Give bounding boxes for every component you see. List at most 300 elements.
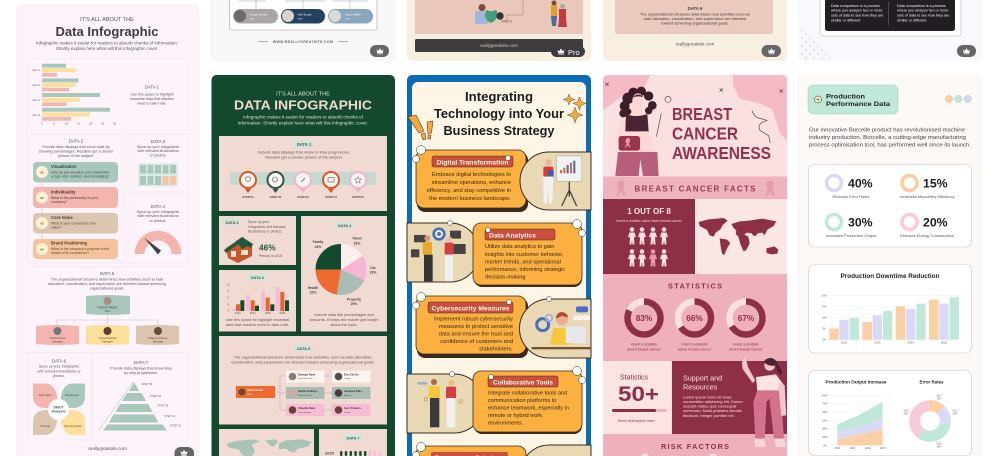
panel: data 6 SWOT bbox=[27, 353, 92, 440]
icon: exclamation marks bbox=[408, 115, 433, 140]
dark comparison panel: Data comparison is a process bbox=[897, 4, 946, 8]
data 1 caption: DATA 1 bbox=[145, 84, 160, 90]
panel: KPI rings bbox=[808, 164, 972, 247]
panel: data 5 org chart: The organizational structure determines how activities such as task bbox=[51, 278, 163, 282]
bar chart: 10 bbox=[65, 122, 69, 126]
pyramid chart: STEP 01 bbox=[170, 424, 182, 428]
org node: manager two: Manager bbox=[102, 340, 113, 344]
panel: data 4 pie chart bbox=[301, 216, 387, 332]
map shape bbox=[699, 218, 778, 255]
subtitle: IT'S ALL ABOUT THE bbox=[80, 17, 134, 23]
org node: president bbox=[86, 295, 130, 315]
badge: gears bbox=[412, 292, 552, 309]
bar chart: 5 bbox=[53, 122, 55, 126]
badge: gears bbox=[412, 146, 426, 162]
panel: data 1 steps: DATA 1 bbox=[297, 142, 312, 147]
panel: data 4 gauge bbox=[128, 194, 188, 263]
data 6 text: toward achieving organizational goals. bbox=[661, 20, 729, 26]
panel: data 4 gauge: with relevant illustrations bbox=[137, 214, 179, 218]
panel: data 5 org chart: DATA 5 bbox=[100, 271, 115, 276]
panel: data 3 waffle bbox=[128, 134, 188, 192]
donut 67%: 67% bbox=[738, 313, 755, 323]
panel: data 1 bar chart bbox=[27, 59, 188, 131]
body text bbox=[485, 244, 565, 280]
panel: technology strategy template bbox=[407, 75, 591, 456]
intro paragraph: industry production. Borcelle, a cutting-edge manufacturing bbox=[809, 135, 966, 141]
title: BREAST bbox=[672, 104, 732, 124]
org row 1: Social Specialist bbox=[298, 377, 313, 380]
panel: data 1 steps bbox=[219, 136, 387, 211]
panel: data 5 org chart: DATA 5 bbox=[297, 347, 310, 351]
halftone dots bbox=[801, 29, 831, 59]
badge: crown bbox=[957, 45, 976, 57]
panel: data 2 list: picture of the subject. bbox=[58, 154, 94, 158]
org node: president: Francis Weiss bbox=[98, 306, 118, 310]
data 6 text bbox=[640, 6, 750, 26]
org row 3: Sales Manager bbox=[298, 412, 312, 414]
pie labels: 22% bbox=[310, 290, 316, 294]
org node: manager one bbox=[36, 325, 79, 345]
dark comparison panel: where you analyze two or more bbox=[831, 8, 882, 12]
footer bar bbox=[415, 39, 583, 52]
person pill: blue: Jason Miller bbox=[345, 12, 361, 16]
heading pill bbox=[488, 376, 558, 387]
pictogram row bbox=[340, 451, 381, 456]
body text: communication platforms to bbox=[488, 398, 556, 404]
dark comparison panel: sets of data to see how they are bbox=[897, 14, 949, 18]
org row 1: Eve Chi Ko bbox=[344, 372, 359, 376]
panel: support and resources: suscipit metus quis consequat bbox=[683, 404, 737, 408]
panel: 50+ statistics: 50+ bbox=[618, 383, 659, 406]
bar chart: 20 bbox=[89, 122, 93, 126]
dark comparison panel: where you analyze two or more bbox=[897, 8, 948, 12]
panel: data 2 bar chart: data that readers need to take note. bbox=[226, 322, 289, 327]
data 6 text: task allocation, coordination, and supervision are directed bbox=[644, 16, 746, 21]
section: digital transformation bbox=[412, 146, 591, 212]
panel: risk factors bbox=[603, 434, 787, 456]
KPI 15%: Increases Machinery Efficiency bbox=[899, 194, 955, 199]
title bbox=[434, 89, 564, 138]
panel: green data infographic template bbox=[212, 75, 395, 456]
heading pill bbox=[428, 302, 513, 313]
panel: 50+ statistics: Short description here bbox=[617, 419, 655, 423]
SWOT diagram: SWOT bbox=[53, 406, 65, 410]
body text: Utilize data analytics to gain bbox=[485, 244, 554, 250]
panel: data 2 list: showing percentages. Readers get a clearer bbox=[39, 150, 114, 154]
heading pill bbox=[432, 156, 513, 167]
data 6 text: The organizational structure determines how activities such as bbox=[640, 11, 750, 16]
bar chart: Item 2 bbox=[32, 83, 40, 87]
stacked area chart: 50% bbox=[822, 418, 828, 422]
SWOT diagram bbox=[33, 384, 85, 435]
bar chart: 2025 bbox=[265, 311, 271, 315]
panel: world map bbox=[219, 429, 314, 456]
dark comparison panel: Data comparison is a process bbox=[831, 4, 880, 8]
panel: statistics: about breast cancer bbox=[678, 348, 712, 352]
panel: support and resources: tincidunt. Integer porttitor vel. bbox=[683, 413, 735, 418]
intro paragraph: process optimisation tool, has performed well since its launch. bbox=[809, 142, 971, 148]
pie labels: Property bbox=[347, 298, 361, 302]
panel: data 3 waffle: Spice up your infographic bbox=[137, 145, 180, 149]
map shape bbox=[227, 439, 312, 456]
panel: data 7 pictogram: 2015 bbox=[325, 450, 335, 456]
stacked area chart: 70% bbox=[822, 402, 828, 406]
panel: statistics: Insert a statistic bbox=[631, 342, 657, 346]
stacked area chart: 60% bbox=[822, 410, 828, 414]
SWOT diagram: Analysis bbox=[52, 410, 66, 414]
badge: Pro: Pro bbox=[568, 48, 580, 57]
list row: core value: What is your company's core bbox=[51, 222, 96, 226]
badge: gears bbox=[450, 366, 586, 384]
title: DATA INFOGRAPHIC bbox=[234, 98, 372, 112]
org node: president: CEO bbox=[105, 309, 110, 313]
step marker 4: STEP 04 bbox=[325, 195, 337, 199]
person pill: blue: Staff bbox=[345, 18, 350, 20]
org node: manager two: Kyla Perkins bbox=[99, 336, 117, 340]
org node: manager one: Manager bbox=[52, 340, 63, 344]
panel: data 2 bar chart: DATA 2 bbox=[251, 276, 264, 280]
title: AWARENESS bbox=[672, 143, 771, 163]
org row 1: Kahaya Dewi bbox=[298, 372, 315, 376]
illustration: standing woman bbox=[742, 357, 786, 447]
illustration: collaborators bbox=[417, 379, 462, 427]
panel: output and error rate charts bbox=[808, 370, 972, 456]
panel: data 3 waffle: or photos. bbox=[150, 154, 166, 158]
illustration: support worker bbox=[532, 306, 591, 349]
website footer bbox=[258, 40, 348, 44]
body text: measures to protect sensitive bbox=[439, 324, 513, 330]
panel: data 7 pictogram bbox=[319, 429, 387, 456]
panel: risk factors: RISK FACTORS bbox=[661, 442, 729, 451]
panel: production performance template bbox=[798, 75, 981, 456]
title bbox=[672, 104, 771, 163]
footer bar: reallygreatsite.com bbox=[480, 43, 518, 48]
bar chart: 5K bbox=[823, 327, 826, 331]
bar chart: 15K bbox=[822, 304, 827, 308]
KPI 40%: Reduces Error Rates bbox=[832, 194, 870, 199]
intro text: Shortly explain here what will this infographic cover. bbox=[56, 46, 158, 51]
heading pill: Data Analytics bbox=[489, 232, 536, 240]
body text: Implement robust cybersecurity bbox=[434, 316, 513, 322]
panel: data 4 pie chart: Include data like percentages and bbox=[314, 312, 374, 317]
body text: performance, informing strategic bbox=[485, 267, 565, 273]
stat: 46 percent: 46% bbox=[259, 242, 276, 252]
org row 2: Daniel Gallego bbox=[298, 389, 318, 393]
org node: manager two bbox=[86, 325, 129, 345]
org node: manager three bbox=[136, 325, 179, 345]
list row: individuality bbox=[33, 187, 118, 208]
stacked area chart: 40% bbox=[822, 427, 828, 431]
org row 3: Lars Peeters bbox=[344, 406, 361, 410]
org node: lead: Helen Smith bbox=[247, 388, 263, 392]
org row 2: Jasmine Ellis bbox=[344, 389, 362, 393]
list row: brand positioning: hearts of its consumers? bbox=[51, 251, 89, 255]
pyramid chart: STEP 03 bbox=[157, 404, 169, 408]
panel: statistics: STATISTICS bbox=[668, 282, 722, 290]
SWOT diagram: Weakness bbox=[65, 393, 79, 397]
list row: visualization: How do you visualize your brand with bbox=[51, 170, 109, 174]
section: cybersecurity measures bbox=[412, 292, 591, 358]
website footer: reallygreatsite.com bbox=[676, 42, 714, 46]
donut chart: 2022 bbox=[936, 396, 942, 398]
badge: crown bbox=[174, 447, 194, 456]
KPI 15%: 15% bbox=[923, 176, 948, 190]
list row: visualization: Visualization bbox=[51, 164, 77, 169]
list row: core value bbox=[33, 213, 118, 234]
badge: crown bbox=[762, 45, 781, 57]
pyramid chart: STEP 04 bbox=[150, 394, 162, 398]
list row: individuality: 02 bbox=[40, 196, 44, 200]
panel: 50+ statistics bbox=[603, 361, 672, 434]
panel: data 6 SWOT: Spice up your infographic bbox=[39, 364, 79, 368]
panel: data 3 waffle: with relevant illustrations bbox=[137, 149, 179, 153]
panel: statistics bbox=[603, 274, 787, 361]
org row 3 bbox=[286, 404, 370, 416]
org node: manager one: Adora Cruz bbox=[50, 336, 66, 340]
step marker 1 bbox=[240, 172, 256, 199]
list row: individuality: company? bbox=[51, 200, 67, 204]
org row 2: Analyst bbox=[344, 394, 351, 397]
donut chart: 30% bbox=[937, 447, 941, 449]
body text: confidence of customers and bbox=[440, 339, 513, 345]
dark comparison panel: similar or different. bbox=[897, 18, 927, 22]
section: data analytics bbox=[407, 220, 586, 287]
intro paragraph bbox=[809, 128, 971, 148]
pyramid chart bbox=[99, 382, 182, 430]
body text bbox=[427, 172, 511, 202]
panel: cream data template, cut off at top bbox=[603, 0, 787, 61]
org row 3: Partner bbox=[344, 411, 351, 414]
org node: manager three: Manager bbox=[153, 340, 163, 344]
bar chart: 15 bbox=[77, 122, 81, 126]
pyramid chart: STEP 05 bbox=[141, 382, 153, 386]
stacked area chart: 30% bbox=[822, 435, 828, 439]
donut chart bbox=[903, 396, 958, 449]
org node: lead: CEO bbox=[247, 394, 252, 396]
panel: world map bbox=[695, 199, 787, 274]
panel: support and resources: consectetur adipiscing elit. Donec bbox=[683, 399, 743, 404]
stat: 46 percent: Person in USA bbox=[259, 254, 283, 258]
intro text bbox=[36, 40, 178, 51]
person pill: blue bbox=[328, 9, 373, 24]
illustration: analysts and target bbox=[411, 227, 466, 281]
bar chart: 10K bbox=[822, 316, 827, 320]
panel: data 6 SWOT: photos. bbox=[53, 374, 65, 378]
panel: support and resources: commodo. Nulla pharetra lobortis bbox=[683, 408, 742, 413]
panel: data 4 gauge: DATA 4 bbox=[151, 204, 166, 209]
pie labels: Family bbox=[313, 240, 323, 244]
illustration: presenter and chart bbox=[543, 156, 582, 206]
website footer: WWW.REALLYGREATSITE.COM bbox=[273, 40, 333, 44]
bar chart bbox=[822, 293, 959, 345]
KPI 40% bbox=[826, 176, 873, 199]
org node: lead bbox=[236, 386, 275, 398]
panel: data 5 org chart: organizational goals. bbox=[90, 286, 124, 290]
donut chart: 35% bbox=[904, 414, 908, 416]
person pill: navy: Neil Smart bbox=[298, 12, 312, 16]
bar chart: 2022 bbox=[841, 341, 848, 345]
bar chart: 10 bbox=[227, 282, 230, 286]
donut 66% bbox=[678, 302, 711, 334]
bar chart: 25 bbox=[101, 122, 105, 126]
donut chart: 20% bbox=[953, 414, 957, 416]
panel: beige healthcare template, cut off at top bbox=[407, 0, 591, 61]
intro text: information. Shortly explain here what will this infographic cover. bbox=[238, 120, 368, 126]
donut chart: 2025 bbox=[903, 411, 909, 413]
panel: data 5 org chart bbox=[219, 336, 387, 424]
decorative marks bbox=[605, 83, 783, 143]
donut 67% bbox=[730, 302, 762, 334]
data 6 text: DATA 6 bbox=[688, 6, 703, 11]
heading pill: Production bbox=[826, 94, 865, 100]
stacked area chart: 80% bbox=[822, 393, 828, 397]
SWOT diagram: Threats bbox=[40, 424, 51, 428]
stacked area chart bbox=[822, 393, 892, 450]
panel: data 1 steps: Readers get a clearer picture of the subject. bbox=[265, 154, 343, 160]
section: collaborative tools bbox=[407, 366, 586, 434]
panel: statistics: Insert a statistic bbox=[681, 342, 708, 346]
website footer: reallygreatsite.com bbox=[88, 446, 127, 451]
list row: brand positioning: What is the company's purpose in the bbox=[51, 247, 109, 251]
icon: family bbox=[551, 0, 567, 27]
data 1 caption: Use this space to highlight bbox=[130, 92, 174, 96]
body text: enhance teamwork, especially in bbox=[488, 406, 569, 412]
data 1 caption: need to take note. bbox=[137, 102, 167, 106]
dark comparison panel bbox=[825, 0, 955, 31]
org node: manager three: Stacey Flores bbox=[149, 336, 168, 340]
intro paragraph: Our innovative Borcelle product has revolutionised machine bbox=[809, 128, 965, 134]
body text: decision-making bbox=[485, 274, 525, 280]
bar chart: 2024 bbox=[908, 341, 914, 345]
heading pill bbox=[808, 85, 898, 114]
donut chart: 2024 bbox=[936, 444, 942, 446]
stacked area chart: 2025 bbox=[880, 446, 886, 450]
pie labels: Travel bbox=[352, 236, 362, 240]
body text: the modern business landscape. bbox=[429, 196, 511, 202]
list row: core value: Core Value bbox=[51, 215, 73, 220]
panel: pink data infographic template bbox=[16, 4, 199, 456]
gauge bbox=[135, 231, 181, 254]
org row 1: Leader bbox=[344, 378, 351, 380]
body text: market trends, and operational bbox=[485, 260, 561, 266]
step marker 2 bbox=[268, 172, 284, 199]
title: Business Strategy bbox=[444, 123, 555, 138]
panel: data 7 pictogram: DATA 7 bbox=[346, 436, 360, 440]
bar chart: Item 1 bbox=[32, 68, 40, 72]
panel: pale blue comparison template, cut off at top bbox=[799, 0, 982, 61]
panel: statistics: about breast cancer bbox=[627, 348, 662, 352]
step marker 3 bbox=[295, 172, 311, 199]
panel: statistics: Insert a statistic bbox=[733, 342, 759, 346]
panel: data 5 org chart: The organizational structure determines how activities, such as task allocation, bbox=[234, 354, 372, 360]
bar chart: 30 bbox=[113, 122, 117, 126]
panel: output and error rate charts: Error Rates bbox=[920, 380, 944, 384]
list row: brand positioning: Brand Positioning bbox=[51, 240, 88, 246]
pie labels: 20% bbox=[351, 302, 357, 306]
bar chart: 2024 bbox=[250, 311, 256, 315]
bar chart: Item 4 bbox=[32, 113, 40, 117]
panel: data 5 org chart: allocation, coordination, and supervision are directed toward achieving bbox=[48, 282, 166, 286]
beige illustration bubble bbox=[520, 152, 591, 210]
donut chart: 15% bbox=[937, 399, 941, 401]
pie labels: Health bbox=[308, 286, 318, 290]
title: Data Infographic bbox=[56, 24, 158, 39]
donut chart: 2023 bbox=[952, 411, 958, 413]
step marker 3: STEP 03 bbox=[297, 195, 309, 199]
panel: data 3 waffle: DATA 3 bbox=[151, 139, 166, 144]
panel: breast cancer awareness template bbox=[603, 75, 787, 456]
KPI 30%: Increases Production Output bbox=[826, 233, 877, 238]
dark comparison panel: sets of data to see how they are bbox=[831, 14, 883, 18]
panel: downtime bar chart: Production Downtime Reduction bbox=[840, 273, 940, 280]
pyramid chart: STEP 02 bbox=[164, 414, 176, 418]
bar chart: 2023 bbox=[874, 341, 881, 345]
panel: data 7 pyramid: by step progression. bbox=[124, 371, 158, 375]
icon: people pictogram bbox=[628, 227, 668, 266]
list row: visualization: 01 bbox=[40, 170, 44, 174]
step marker 4 bbox=[323, 172, 339, 199]
panel: support and resources: Support and bbox=[683, 374, 722, 382]
pie chart bbox=[328, 257, 354, 282]
panel: data 4 gauge: or photos. bbox=[150, 219, 166, 223]
stacked area chart: 2023 bbox=[849, 446, 856, 450]
step marker 2: STEP 02 bbox=[270, 195, 282, 199]
heading pill: Collaborative Tools bbox=[493, 379, 553, 386]
panel: data 4 gauge: Spice up your infographic bbox=[137, 210, 180, 214]
panel: statistics: about breast cancer bbox=[729, 348, 764, 352]
title: CANCER bbox=[672, 124, 738, 144]
panel: 1 out of 8: Insert a realistic value insert breast cancer bbox=[616, 219, 683, 223]
bar chart: 8 bbox=[228, 288, 230, 292]
panel: data 7 pyramid bbox=[93, 353, 188, 440]
panel: data 3 house stat bbox=[219, 216, 296, 265]
panel: support and resources bbox=[672, 361, 787, 434]
KPI 20% bbox=[900, 214, 954, 238]
bar chart: 2023 bbox=[235, 311, 241, 315]
body text: remote or hybrid work bbox=[488, 413, 542, 419]
org row 2: Marketing Lead bbox=[298, 394, 312, 397]
bar chart: 2 bbox=[228, 309, 230, 313]
list row: individuality: What is the personality of your bbox=[51, 196, 99, 200]
intro text: Infographic makes it easier for readers to absorb chunks of bbox=[243, 114, 364, 120]
badge: Pro bbox=[551, 46, 585, 57]
intro text: Infographic makes it easier for readers to absorb chunks of information. bbox=[36, 40, 178, 46]
panel: data 3 house stat: DATA 3 bbox=[225, 221, 239, 225]
org row 1 bbox=[286, 370, 370, 382]
stacked area chart: 2024 bbox=[865, 446, 871, 450]
panel: 1 out of 8: 1 OUT OF 8 bbox=[627, 207, 671, 216]
KPI 20%: 20% bbox=[923, 216, 948, 230]
bar chart: Item 3 bbox=[32, 98, 40, 102]
bar chart: 0 bbox=[41, 122, 43, 126]
list row: core value: value? bbox=[51, 226, 61, 230]
panel: beige healthcare template, cut off at top: STEP 02 bbox=[502, 20, 513, 24]
body text: Integrate collaborative tools and bbox=[488, 390, 567, 396]
badge: gears bbox=[448, 220, 586, 236]
badge: crown bbox=[370, 45, 389, 57]
panel: 50+ statistics: Statistics bbox=[620, 374, 649, 382]
panel: support and resources: Resources bbox=[683, 382, 718, 392]
panel: data 2 list bbox=[27, 134, 124, 263]
dark comparison panel: similar or different. bbox=[831, 18, 861, 22]
person pill: grey: Grace Daniel bbox=[250, 12, 268, 16]
bar chart: 20K bbox=[822, 293, 827, 297]
stacked area chart: 0% bbox=[823, 443, 828, 447]
list row: brand positioning: 04 bbox=[40, 247, 44, 251]
bar chart: 4 bbox=[228, 302, 230, 306]
panel: data 4 pie chart: amounts. It helps the reader get insight bbox=[309, 317, 379, 322]
panel: data 2 bar chart: Use this space to highlight essential bbox=[226, 317, 289, 322]
